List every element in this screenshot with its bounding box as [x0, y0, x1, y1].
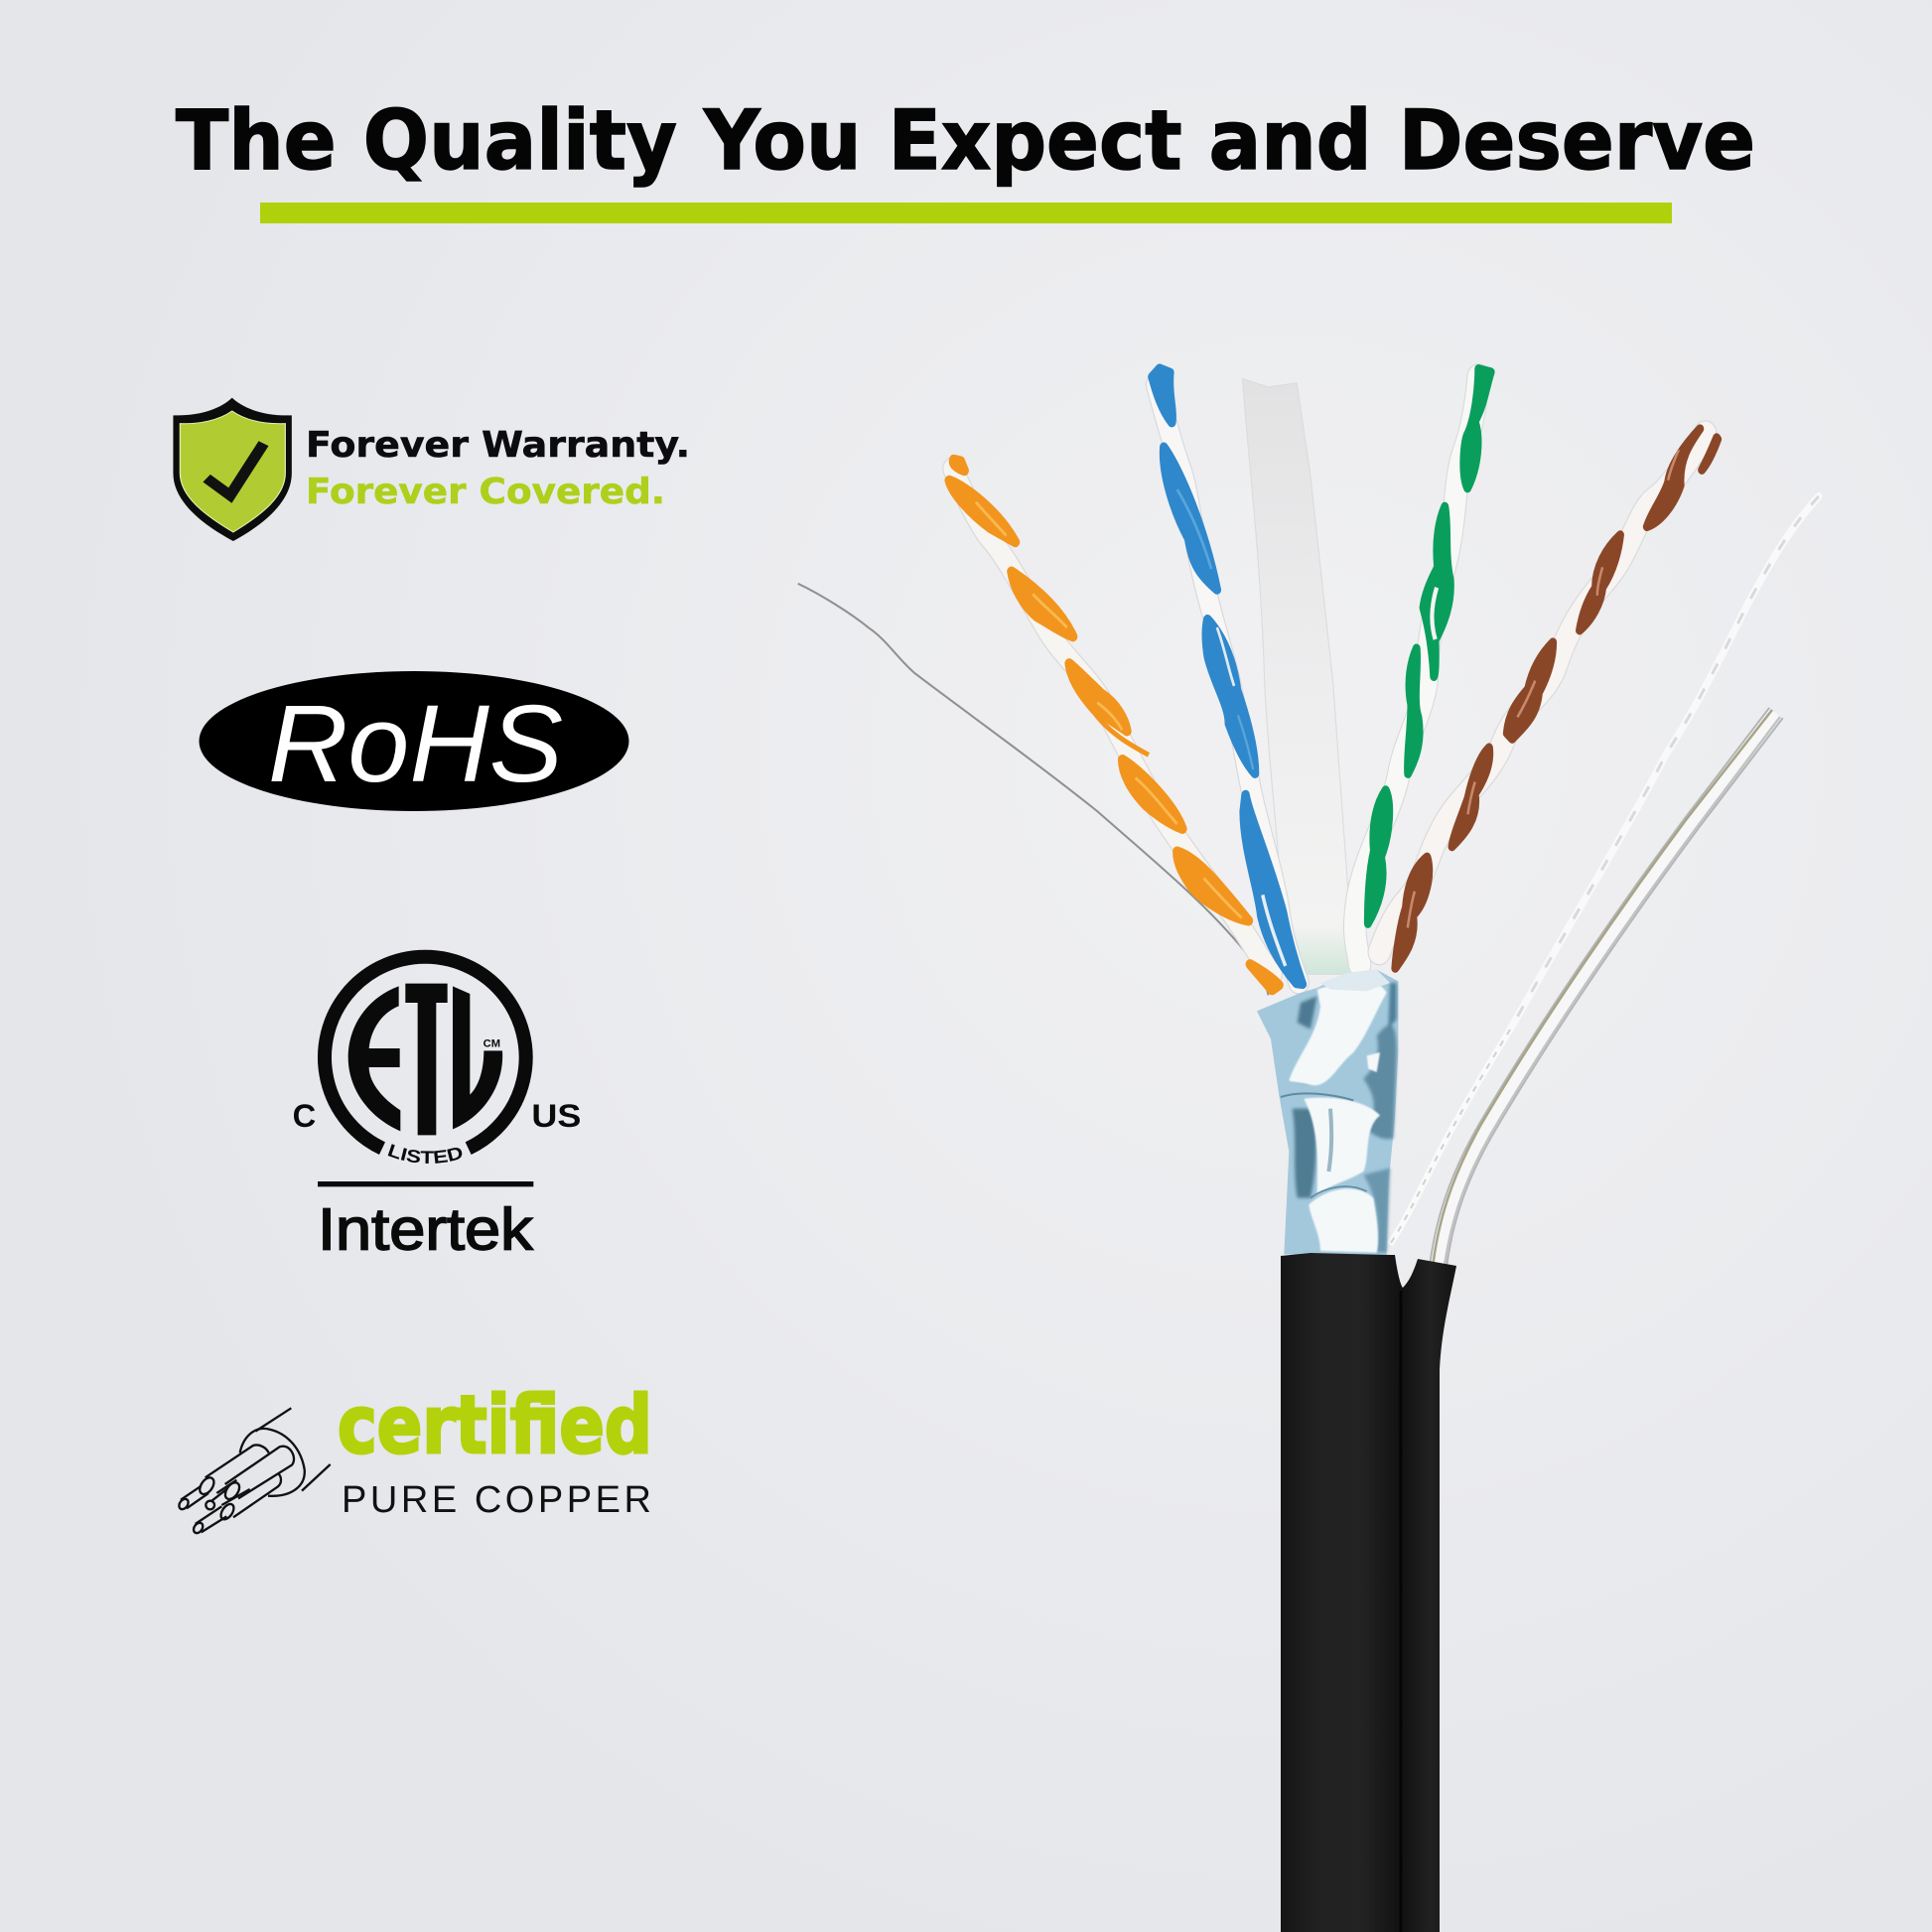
icon: copper cable [177, 1408, 331, 1535]
cable: messenger black jacket [1398, 1259, 1456, 1932]
ETL listed Intertek mark: Intertek [318, 1195, 533, 1262]
certified text: certified [338, 1379, 652, 1471]
ETL listed Intertek mark [293, 949, 581, 1262]
warranty text: Forever Warranty. [306, 425, 690, 466]
cable: main black jacket [1281, 1253, 1403, 1932]
title underline [260, 203, 1672, 223]
ETL listed Intertek mark: LISTED [387, 1144, 463, 1164]
certified text: PURE COPPER [342, 1479, 651, 1521]
warranty text [306, 425, 690, 512]
cable: green pair [1355, 368, 1491, 964]
cable: drain wire [798, 584, 1269, 995]
cable: blue pair [1152, 368, 1303, 984]
title: The Quality You Expect and Deserve [176, 92, 1755, 189]
cable: foil shield [1257, 970, 1398, 1256]
RoHS badge: RoHS [268, 683, 563, 805]
cable: white rip cord [1390, 496, 1819, 1244]
ETL listed Intertek mark: US [531, 1097, 581, 1134]
cable: orange pair [949, 460, 1279, 990]
cable: transparent messenger tube [1433, 710, 1780, 1274]
ETL listed Intertek mark: CM [483, 1037, 500, 1049]
ETL listed Intertek mark: C [293, 1097, 316, 1134]
icon: warranty shield [173, 398, 292, 541]
warranty text: Forever Covered. [306, 472, 665, 512]
RoHS badge [199, 671, 629, 811]
cable: translucent filler [1242, 379, 1352, 974]
cable: brown pair [1379, 429, 1718, 968]
certified text [338, 1379, 652, 1521]
